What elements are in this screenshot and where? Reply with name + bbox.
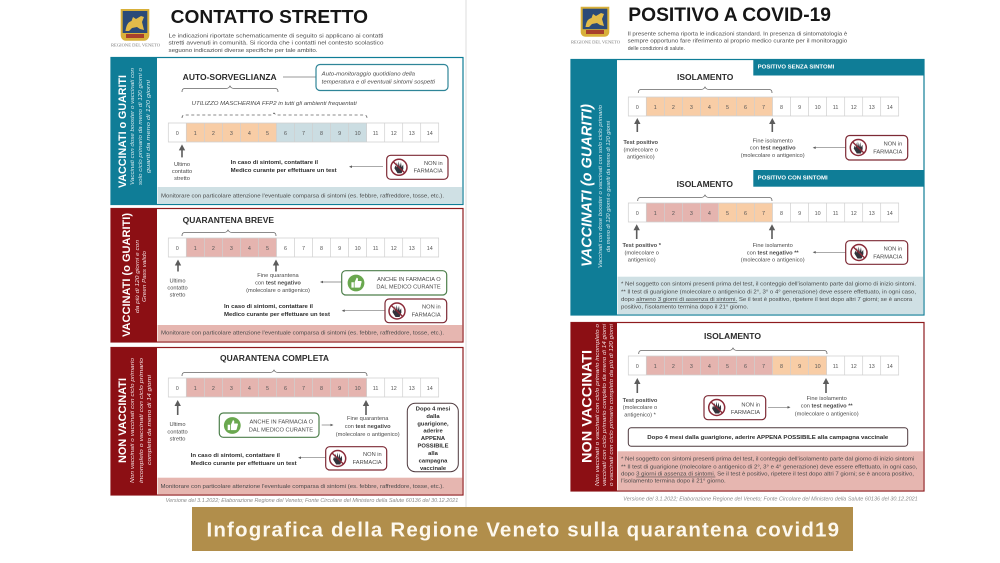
sidebar: vaccinati (o guariti) xyxy=(111,208,157,342)
band: footnotes: positivo, l'isolamento termina dopo il 21° giorno. xyxy=(621,304,749,310)
callout: auto-monitoraggio: Auto-monitoraggio quotidiano della xyxy=(321,72,415,78)
timeline: days 0-14: 11 xyxy=(833,364,838,370)
tab: positivo con sintomi xyxy=(753,170,924,187)
badge: anche in farmacia xyxy=(219,413,319,437)
logo: regione veneto: REGIONE DEL VENETO xyxy=(111,43,160,48)
timeline: days 0-14: 7 xyxy=(302,246,305,252)
timeline: days 0-14: 11 xyxy=(373,386,378,392)
label: test positivo: (molecolare o xyxy=(623,147,658,153)
timeline: days 0-14: 3 xyxy=(230,246,233,252)
timeline: days 0-14: 10 xyxy=(355,246,361,252)
timeline: days 0-14: 14 xyxy=(887,211,893,217)
intro text xyxy=(628,32,847,52)
band: monitoraggio xyxy=(158,478,462,494)
sidebar: vaccinati (o guariti): Vaccinati con dose booster o vaccinati con solo ciclo primario xyxy=(598,105,604,268)
timeline: days 0-14: 14 xyxy=(427,386,433,392)
badge: non in farmacia: FARMACIA xyxy=(873,254,903,260)
timeline: days 0-14: 9 xyxy=(338,246,341,252)
sidebar: vaccinati (o guariti): VACCINATI (o GUARITI) xyxy=(121,213,133,337)
panel: vaccinati o guariti xyxy=(111,58,463,204)
band: monitoraggio xyxy=(158,325,462,341)
label: fine quarantena: (molecolare o antigenico) xyxy=(336,432,400,438)
label: ultimo contatto stretto: Ultimo xyxy=(169,279,186,285)
callout: dopo 4 mesi: dalla xyxy=(426,414,440,420)
timeline: days 0-14: 0 xyxy=(176,386,179,392)
callout: dopo 4 mesi: vaccinale xyxy=(420,466,447,472)
timeline: days 0-14: 0 xyxy=(636,211,639,217)
text: in caso di sintomi: Medico curante per effettuare un test xyxy=(224,312,330,318)
badge: non in farmacia xyxy=(704,396,766,420)
label: ultimo contatto stretto: contatto xyxy=(172,169,192,175)
timeline: days 0-14: 11 xyxy=(373,246,378,252)
timeline: days 0-14: 3 xyxy=(230,131,233,137)
sidebar: non vaccinati: NON VACCINATI xyxy=(580,350,596,463)
sidebar: vaccinati (o guariti): da più di 120 giorni e con xyxy=(135,240,141,313)
label: ultimo contatto stretto: stretto xyxy=(170,293,185,299)
timeline: days 0-14: 1 xyxy=(194,386,197,392)
timeline: days 0-14: 10 xyxy=(815,105,821,111)
timeline: days 0-14: 13 xyxy=(869,211,875,217)
timeline: days 0-14: 5 xyxy=(266,386,269,392)
arrow: fine quarantena xyxy=(363,400,369,415)
sidebar: vaccinati o guariti: VACCINATI o GUARITI xyxy=(117,75,129,188)
badge: non in farmacia xyxy=(326,447,387,470)
badge: non in farmacia: NON in xyxy=(424,161,443,167)
badge: non in farmacia: FARMACIA xyxy=(873,149,903,155)
timeline: days 0-14: 2 xyxy=(672,364,675,370)
document: contatto stretto xyxy=(111,0,466,507)
timeline: days 0-14: 2 xyxy=(672,105,675,111)
sidebar: vaccinati (o guariti): da meno di 120 giorni o guariti da meno di 120 giorni xyxy=(606,120,612,252)
timeline: days 0-14: 6 xyxy=(744,364,747,370)
arrow: fine isolamento xyxy=(769,118,776,132)
arrow: ultimo contatto xyxy=(174,400,181,415)
timeline: days 0-14: 8 xyxy=(320,386,323,392)
timeline: days 0-14: 3 xyxy=(690,364,693,370)
timeline: days 0-14: 8 xyxy=(780,105,783,111)
title: contatto stretto: CONTATTO STRETTO xyxy=(171,6,368,27)
timeline: days 0-14: 1 xyxy=(654,211,657,217)
label: ultimo contatto stretto: Ultimo xyxy=(174,162,190,168)
label: test positivo: (molecolare o xyxy=(623,405,657,411)
sidebar: non vaccinati xyxy=(111,348,157,495)
text: in caso di sintomi xyxy=(231,160,337,174)
timeline: days 0-14: 12 xyxy=(851,105,857,111)
band: footnotes: l'isolamento termina dopo il 21° giorno. xyxy=(621,479,726,485)
timeline: days 0-14: 2 xyxy=(212,386,215,392)
heading: quarantena completa: QUARANTENA COMPLETA xyxy=(220,354,329,363)
label: fine isolamento: (molecolare o antigenico) xyxy=(795,411,859,417)
text: in caso di sintomi: In caso di sintomi, contattare il xyxy=(224,304,313,310)
badge: anche in farmacia: DAL MEDICO CURANTE xyxy=(376,285,441,291)
sidebar: non vaccinati: incompleto o vaccinati con ciclo primario xyxy=(139,358,145,483)
banner: caption: Infografica della Regione Veneto sulla quarantena covid19 xyxy=(206,519,839,542)
heading: auto-sorveglianza: AUTO-SORVEGLIANZA xyxy=(183,73,277,82)
heading: isolamento: ISOLAMENTO xyxy=(677,73,733,82)
callout: dopo 4 mesi: Dopo 4 mesi xyxy=(416,406,451,412)
arrow: test positivo xyxy=(634,378,640,393)
label: fine isolamento: con test negativo xyxy=(750,146,796,152)
timeline: days 0-14: 6 xyxy=(284,131,287,137)
timeline: days 0-14: 11 xyxy=(833,211,838,217)
timeline: days 0-14: 4 xyxy=(708,211,711,217)
timeline: days 0-14: 1 xyxy=(654,105,657,111)
timeline: days 0-14: 4 xyxy=(248,131,251,137)
callout: auto-monitoraggio xyxy=(316,64,448,90)
timeline: days 0-14: 3 xyxy=(690,211,693,217)
intro text: sempre opportuno fare riferimento al proprio medico curante per il monitoraggio xyxy=(628,39,847,45)
badge: non in farmacia: FARMACIA xyxy=(414,169,443,175)
callout: dopo 4 mesi: APPENA xyxy=(421,436,446,442)
timeline: days 0-14: 9 xyxy=(798,105,801,111)
label: fine isolamento: Fine isolamento xyxy=(753,243,793,249)
callout: dopo 4 mesi: campagna xyxy=(419,458,448,464)
timeline: days 0-14: 0 xyxy=(176,246,179,252)
sidebar: vaccinati o guariti: Vaccinati con dose booster o vaccinati con xyxy=(130,68,136,185)
timeline: days 0-14: 12 xyxy=(851,211,857,217)
timeline: days 0-14: 4 xyxy=(708,364,711,370)
mask note: UTILIZZO MASCHERINA FFP2 in tutti gli ambienti frequentati xyxy=(192,101,357,107)
sidebar: non vaccinati: o vaccinati con ciclo primario completo da più di 120 giorni xyxy=(609,323,615,486)
timeline: days 0-14: 7 xyxy=(302,131,305,137)
band: monitoraggio: Monitorare con particolare attenzione l'eventuale comparsa di sintomi (es. febbre, raffreddore, tosse, etc.). xyxy=(161,194,444,200)
band: monitoraggio: Monitorare con particolare attenzione l'eventuale comparsa di sintomi (es. febbre, raffreddore, tosse, etc.). xyxy=(160,484,444,490)
timeline: days 0-14: 4 xyxy=(248,386,251,392)
timeline: days 0-14 xyxy=(168,378,439,397)
panel: vaccinati o guariti da più di 120 giorni xyxy=(111,208,463,342)
label: ultimo contatto stretto: stretto xyxy=(170,437,185,443)
sidebar: vaccinati o guariti xyxy=(111,58,157,204)
sidebar: non vaccinati: NON VACCINATI xyxy=(117,378,129,463)
band: monitoraggio: Monitorare con particolare attenzione l'eventuale comparsa di sintomi (es. febbre, raffreddore, tosse, etc.). xyxy=(161,330,444,336)
badge: anche in farmacia: ANCHE IN FARMACIA O xyxy=(377,277,441,283)
label: fine isolamento: (molecolare o antigenico) xyxy=(741,153,805,159)
band: footnotes: ** Il test di guarigione (molecolare o antigenico di 2°, 3° e 4° generazione) deve essere effettuato, in ogni caso, xyxy=(621,464,918,470)
timeline: days 0-14: 8 xyxy=(780,211,783,217)
label: test positivo: antigenico) * xyxy=(624,412,657,418)
timeline: days 0-14: 0 xyxy=(176,131,179,137)
label: fine isolamento: con test negativo ** xyxy=(801,404,853,410)
logo: regione veneto xyxy=(111,9,160,48)
timeline: days 0-14: 11 xyxy=(833,105,838,111)
timeline: days 0-14: 12 xyxy=(391,246,397,252)
timeline: days 0-14: 10 xyxy=(355,131,361,137)
arrow: fine quarantena xyxy=(273,260,279,272)
band: footnotes: dopo 3 giorni di assenza di sintomi. Se il test è positivo, ripetere il test dopo altri 7 giorni; se è ancora positivo, xyxy=(621,472,914,478)
timeline: days 0-14: 6 xyxy=(744,211,747,217)
label: test positivo: Test positivo xyxy=(623,140,659,146)
panel: non vaccinati xyxy=(571,322,924,491)
logo: regione veneto: REGIONE DEL VENETO xyxy=(571,39,620,44)
badge: non in farmacia xyxy=(385,299,447,323)
badge: non in farmacia: FARMACIA xyxy=(412,312,441,318)
badge: non in farmacia xyxy=(846,136,908,160)
timeline: days 0-14: 14 xyxy=(887,105,893,111)
label: fine quarantena: (molecolare o antigenico) xyxy=(246,288,310,294)
badge: non in farmacia xyxy=(387,155,448,179)
label: ultimo contatto stretto: stretto xyxy=(174,176,190,182)
timeline: days 0-14: 13 xyxy=(409,246,415,252)
timeline: days 0-14: 5 xyxy=(266,246,269,252)
badge: non in farmacia: FARMACIA xyxy=(353,460,382,466)
badge: anche in farmacia: DAL MEDICO CURANTE xyxy=(249,427,313,433)
version note: Versione del 3.1.2022; Elaborazione Regione del Veneto; Fonte Circolare del Ministero della Salute 60136 del 30.12.2021 xyxy=(166,498,459,504)
label: test positivo: Test positivo xyxy=(623,398,658,404)
timeline: days 0-14: 4 xyxy=(248,246,251,252)
intro text xyxy=(168,34,384,54)
sidebar: non vaccinati: Non vaccinati o vaccinati con ciclo primario incompleto o xyxy=(595,324,601,486)
callout: auto-monitoraggio: temperatura e di eventuali sintomi sospetti xyxy=(322,80,436,86)
label: fine isolamento: Fine isolamento xyxy=(807,396,847,402)
badge: anche in farmacia: ANCHE IN FARMACIA O xyxy=(249,420,314,426)
timeline: days 0-14: 10 xyxy=(355,386,361,392)
badge: non in farmacia: NON in xyxy=(422,304,441,310)
label: ultimo contatto stretto: Ultimo xyxy=(169,422,186,428)
badge: non in farmacia: NON in xyxy=(741,402,760,408)
text: in caso di sintomi: In caso di sintomi, contattare il xyxy=(191,453,280,459)
arrow: fine isolamento xyxy=(823,378,829,393)
timeline: days 0-14: 6 xyxy=(284,246,287,252)
intro text: seguono indicazioni diverse specifiche per tale ambito. xyxy=(168,48,318,54)
label: fine quarantena: con test negativo xyxy=(255,280,301,286)
timeline: days 0-14: 5 xyxy=(726,364,729,370)
label: ultimo contatto stretto: contatto xyxy=(167,286,188,292)
timeline: days 0-14: 7 xyxy=(762,105,765,111)
intro text: Il presente schema riporta le indicazioni standard. In presenza di sintomatologia è xyxy=(628,32,847,38)
timeline: days 0-14: 2 xyxy=(212,131,215,137)
logo: regione veneto xyxy=(571,7,620,44)
badge: non in farmacia xyxy=(846,241,908,264)
title: positivo a covid-19: POSITIVO A COVID-19 xyxy=(628,5,831,26)
timeline: days 0-14: 9 xyxy=(798,364,801,370)
timeline: days 0-14: 13 xyxy=(409,386,415,392)
callout: dopo 4 mesi: guarigione, xyxy=(417,421,449,427)
timeline: days 0-14: 0 xyxy=(636,364,639,370)
timeline: days 0-14: 2 xyxy=(672,211,675,217)
callout: dopo 4 mesi: alla xyxy=(428,451,439,457)
arrow: fine isolamento xyxy=(769,224,775,239)
timeline: days 0-14: 14 xyxy=(887,364,893,370)
badge: non in farmacia: NON in xyxy=(884,142,902,148)
timeline: days 0-14: 8 xyxy=(780,364,783,370)
timeline: days 0-14: 8 xyxy=(320,246,323,252)
band: footnotes: dopo almeno 3 giorni di assenza di sintomi. Se il test è positivo, ripetere il test dopo altri 7 giorni; se è ancora xyxy=(621,297,913,303)
timeline: days 0-14: 2 xyxy=(212,246,215,252)
sidebar: non vaccinati: Non vaccinati o vaccinati con ciclo primario xyxy=(130,358,136,483)
sidebar: non vaccinati: completo da meno di 14 giorni xyxy=(147,374,153,465)
arrow: test positivo xyxy=(634,224,640,239)
badge: anche in farmacia xyxy=(342,271,447,295)
label: fine isolamento: Fine isolamento xyxy=(753,139,793,145)
sidebar: non vaccinati: vaccinati con ciclo primario completo da meno di 14 giorni xyxy=(602,323,608,486)
heading: isolamento: ISOLAMENTO xyxy=(677,180,733,189)
callout: dopo 4 mesi xyxy=(407,403,458,472)
text: in caso di sintomi: In caso di sintomi, contattare il xyxy=(231,160,318,166)
band: footnotes: * Nel soggetto con sintomi presenti prima del test, il conteggio dell'isolamento parte dal giorno di inizio sintomi. xyxy=(621,282,916,288)
callout: dopo 4 mesi: POSSIBILE xyxy=(418,443,449,449)
callout: dopo 4 mesi: Dopo 4 mesi dalla guarigione, aderire APPENA POSSIBILE alla campagna vaccinale xyxy=(647,435,889,441)
version note: Versione del 3.1.2022; Elaborazione Regione del Veneto; Fonte Circolare del Ministero della Salute 60136 del 30.12.2021 xyxy=(623,497,918,503)
timeline: days 0-14 xyxy=(628,203,899,222)
arrow: ultimo contatto xyxy=(179,144,185,157)
label: test positivo: antigenico) xyxy=(627,155,655,161)
badge: non in farmacia: FARMACIA xyxy=(731,410,760,416)
sidebar: vaccinati o guariti: solo ciclo primario da meno di 120 giorni o xyxy=(138,68,144,185)
badge: non in farmacia: NON in xyxy=(363,452,382,458)
timeline: days 0-14: 13 xyxy=(409,131,415,137)
timeline: days 0-14: 0 xyxy=(636,105,639,111)
label: ultimo contatto stretto: contatto xyxy=(167,429,188,435)
intro text: delle condizioni di salute. xyxy=(628,46,685,52)
tab: positivo con sintomi: POSITIVO CON SINTOMI xyxy=(758,176,828,182)
timeline: days 0-14: 9 xyxy=(338,131,341,137)
label: test positivo: (molecolare o xyxy=(624,250,659,256)
callout: dopo 4 mesi xyxy=(628,428,908,446)
timeline: days 0-14: 13 xyxy=(869,105,875,111)
text: in caso di sintomi xyxy=(191,453,297,467)
timeline: days 0-14: 5 xyxy=(726,211,729,217)
band: footnotes xyxy=(618,451,923,490)
label: fine quarantena: con test negativo xyxy=(345,424,391,430)
arrow: test positivo xyxy=(634,118,640,132)
timeline: days 0-14: 7 xyxy=(302,386,305,392)
timeline: days 0-14 xyxy=(628,356,899,375)
timeline: days 0-14: 1 xyxy=(194,131,197,137)
sidebar: vaccinati (o guariti): VACCINATI (o GUARITI) xyxy=(580,104,596,267)
sidebar: vaccinati o guariti: guariti da meno di 120 giorni xyxy=(146,79,152,173)
timeline: days 0-14: 10 xyxy=(815,364,821,370)
timeline: days 0-14: 14 xyxy=(427,246,433,252)
document: positivo a covid-19 xyxy=(571,5,924,503)
panel: non vaccinati xyxy=(111,348,463,495)
label: test positivo: Test positivo * xyxy=(622,243,662,249)
arrow: ultimo contatto xyxy=(175,260,181,272)
timeline: days 0-14: 4 xyxy=(708,105,711,111)
timeline: days 0-14 xyxy=(168,238,439,257)
timeline: days 0-14: 9 xyxy=(338,386,341,392)
timeline: days 0-14: 7 xyxy=(762,211,765,217)
band: footnotes: * Nel soggetto con sintomi presenti prima del test, il conteggio dell'isolamento parte dal giorno di inizio sintomi xyxy=(621,457,914,463)
timeline: days 0-14: 11 xyxy=(373,131,378,137)
callout: dopo 4 mesi: aderire xyxy=(423,429,443,435)
label: fine isolamento: (molecolare o antigenico) xyxy=(741,258,805,264)
sidebar: vaccinati (o guariti): Green Pass valido xyxy=(142,251,148,302)
timeline: days 0-14: 6 xyxy=(284,386,287,392)
label: fine isolamento: con test negativo ** xyxy=(747,250,799,256)
band: footnotes xyxy=(618,277,923,314)
timeline: days 0-14: 7 xyxy=(762,364,765,370)
band: monitoraggio xyxy=(158,187,462,204)
tab: positivo senza sintomi xyxy=(753,60,924,76)
heading: isolamento: ISOLAMENTO xyxy=(704,332,761,341)
label: fine quarantena: Fine quarantena xyxy=(347,416,389,422)
timeline: days 0-14: 10 xyxy=(815,211,821,217)
badge: non in farmacia: NON in xyxy=(884,246,902,252)
timeline: days 0-14: 5 xyxy=(266,131,269,137)
intro text: stretti avvenuti in comunità. Si ricorda che i contatti nel contesto scolastico xyxy=(168,41,384,47)
timeline: days 0-14: 13 xyxy=(869,364,875,370)
timeline: days 0-14: 5 xyxy=(726,105,729,111)
timeline: days 0-14: 3 xyxy=(690,105,693,111)
timeline: days 0-14: 9 xyxy=(798,211,801,217)
banner: caption xyxy=(192,507,853,551)
label: fine quarantena: Fine quarantena xyxy=(257,273,300,279)
heading: quarantena breve: QUARANTENA BREVE xyxy=(183,216,275,225)
timeline: days 0-14: 3 xyxy=(230,386,233,392)
timeline: days 0-14: 12 xyxy=(851,364,857,370)
timeline: days 0-14: 1 xyxy=(194,246,197,252)
text: in caso di sintomi: Medico curante per effettuare un test xyxy=(191,461,297,467)
timeline: days 0-14: 8 xyxy=(320,131,323,137)
text: in caso di sintomi xyxy=(224,304,330,318)
timeline: days 0-14: 12 xyxy=(391,131,397,137)
text: in caso di sintomi: Medico curante per effettuare un test xyxy=(231,168,337,174)
tab: positivo senza sintomi: POSITIVO SENZA SINTOMI xyxy=(758,64,835,70)
timeline: days 0-14 xyxy=(628,97,899,116)
label: test positivo: antigenico) xyxy=(628,258,656,264)
panel: vaccinati (o guariti) xyxy=(571,60,924,315)
intro text: Le indicazioni riportate schematicamente di seguito si applicano ai contatti xyxy=(168,34,384,40)
band: footnotes: ** Il test di guarigione (molecolare o antigenico di 2°, 3° o 4° generazione) deve essere effettuato, in ogni caso, xyxy=(621,290,916,296)
timeline: days 0-14: 6 xyxy=(744,105,747,111)
timeline: days 0-14 xyxy=(168,123,439,142)
timeline: days 0-14: 1 xyxy=(654,364,657,370)
timeline: days 0-14: 14 xyxy=(427,131,433,137)
sidebar: non vaccinati xyxy=(571,322,617,491)
timeline: days 0-14: 12 xyxy=(391,386,397,392)
sidebar: vaccinati (o guariti) xyxy=(571,60,617,315)
